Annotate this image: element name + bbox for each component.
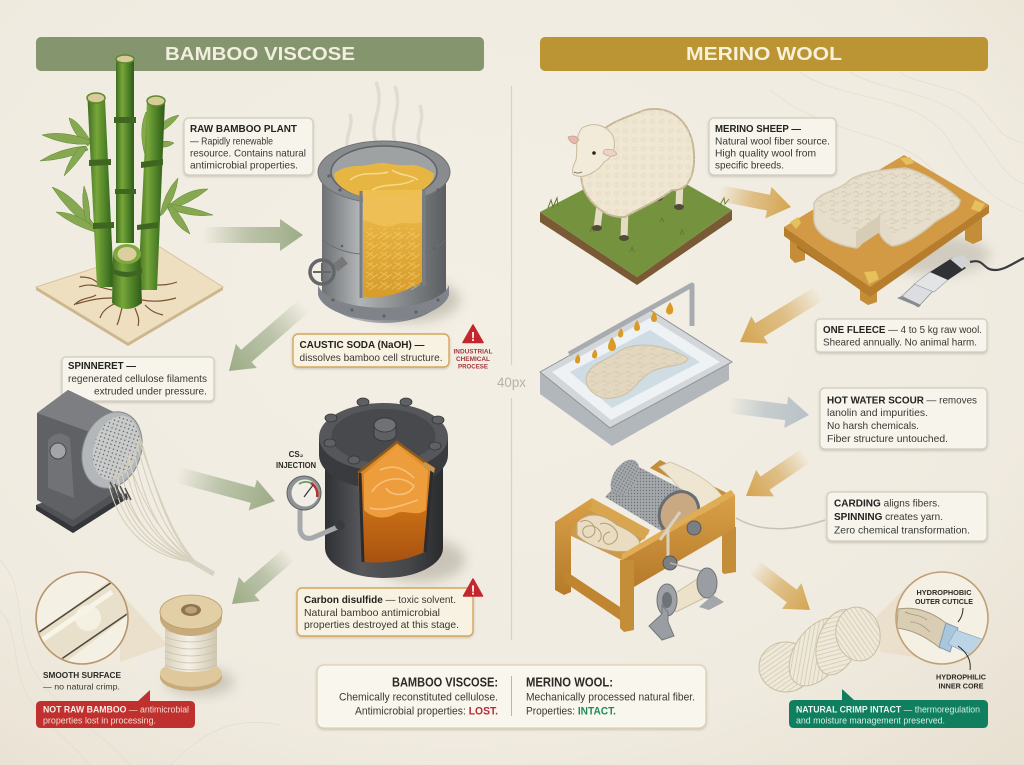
callout: spinneret <box>62 357 214 401</box>
callout: raw bamboo plant: resource. Contains natural <box>190 148 306 160</box>
callout: merino sheep <box>709 118 836 175</box>
callout: merino sheep: MERINO SHEEP — <box>715 124 802 135</box>
illustration: carbon disulfide reactor <box>287 398 465 582</box>
illustration: hot water scour tub <box>540 285 732 446</box>
callout: raw bamboo plant <box>184 118 313 175</box>
arrow: scour to carding <box>737 442 815 509</box>
callout: hot water scour: No harsh chemicals. <box>827 421 919 432</box>
callout: one fleece: Sheared annually. No animal harm. <box>823 338 977 348</box>
illustration: bamboo plant <box>36 55 223 346</box>
callout: caustic soda <box>293 334 449 367</box>
warning: industrial chemical process: PROCESE <box>458 364 489 370</box>
callout: merino sheep: High quality wool from <box>715 148 816 160</box>
spacing note: 40px <box>497 375 526 390</box>
arrow: sheep to fleece <box>716 177 794 223</box>
label: hydrophobic outer cuticle <box>915 588 973 606</box>
summary: bamboo viscose <box>339 676 498 718</box>
label: hydrophilic inner core <box>936 672 987 690</box>
callout: carbon disulfide: Natural bamboo antimicrobial <box>304 608 440 619</box>
callout: hot water scour: HOT WATER SCOUR — removes <box>827 396 977 406</box>
callout: carding and spinning: Zero chemical transformation. <box>834 526 970 536</box>
warning icon: carbon disulfide: ! <box>471 582 475 598</box>
label: smooth surface: SMOOTH SURFACE <box>43 670 121 680</box>
callout: spinneret: SPINNERET — <box>68 361 137 372</box>
callout: carbon disulfide: properties destroyed at this stage. <box>304 620 459 631</box>
illustration: magnified smooth fiber and spool <box>30 572 234 696</box>
label: hydrophobic outer cuticle: HYDROPHOBIC <box>916 588 972 597</box>
illustration: yarn skein and fiber cross-section <box>759 572 990 696</box>
arrow: carding to yarn <box>744 554 820 623</box>
callout: not raw bamboo <box>36 690 195 728</box>
callout: spinneret: regenerated cellulose filaments <box>68 374 207 385</box>
summary: merino wool: Mechanically processed natural fiber. <box>526 692 695 704</box>
callout: natural crimp intact: and moisture management preserved. <box>796 716 945 726</box>
header: merino wool <box>540 37 988 71</box>
arrow: scour to callout <box>727 389 811 431</box>
label: CS2 injection: INJECTION <box>276 461 316 470</box>
arrow: fleece to scour <box>732 279 829 356</box>
warning: industrial chemical process: ! <box>471 329 475 344</box>
summary: merino wool <box>526 676 695 718</box>
callout: one fleece: ONE FLEECE — 4 to 5 kg raw wool. <box>823 325 982 336</box>
warning icon: carbon disulfide <box>464 579 482 598</box>
label: hydrophilic inner core: INNER CORE <box>938 682 984 690</box>
callout: not raw bamboo: NOT RAW BAMBOO — antimicrobial <box>43 704 189 714</box>
illustration: merino sheep on grass <box>540 109 732 285</box>
warning: industrial chemical process: CHEMICAL <box>456 356 490 363</box>
callout: natural crimp intact <box>789 689 988 728</box>
callout: caustic soda: dissolves bamboo cell structure. <box>300 353 442 364</box>
callout: hot water scour: Fiber structure untouched. <box>827 434 948 445</box>
illustration: fleece on table <box>784 155 1024 307</box>
arrow: spinneret to CS2 vat <box>173 459 279 516</box>
callout: merino sheep: Natural wool fiber source. <box>715 136 830 148</box>
summary: bamboo viscose: Chemically reconstituted cellulose. <box>339 692 498 704</box>
arrow: bamboo to caustic vat <box>203 219 303 251</box>
callout: carding and spinning: SPINNING creates yarn. <box>834 512 943 523</box>
illustration: spinneret machine <box>36 390 214 574</box>
callout: raw bamboo plant: RAW BAMBOO PLANT <box>190 124 298 135</box>
callout: carbon disulfide: Carbon disulfide — toxic solvent. <box>304 595 456 606</box>
callout: natural crimp intact: NATURAL CRIMP INTACT — thermoregulation <box>796 704 980 714</box>
summary: bamboo viscose: BAMBOO VISCOSE: <box>392 676 498 690</box>
illustration: caustic soda vat <box>310 82 460 323</box>
summary panel <box>317 665 706 728</box>
callout: raw bamboo plant: — Rapidly renewable <box>190 136 273 148</box>
callout: one fleece <box>816 319 987 352</box>
label: smooth surface <box>43 670 121 692</box>
label: CS2 injection: CS₂ <box>289 450 304 459</box>
callout: merino sheep: specific breeds. <box>715 160 784 172</box>
callout: carding and spinning: CARDING aligns fibers. <box>834 498 940 510</box>
arrow: reactor to spool <box>222 541 301 616</box>
header: bamboo viscose <box>36 37 484 71</box>
illustration: carding machine <box>555 455 825 640</box>
summary: merino wool: MERINO WOOL: <box>526 676 613 690</box>
label: hydrophobic outer cuticle: OUTER CUTICLE <box>915 597 973 606</box>
callout: carbon disulfide <box>297 588 473 636</box>
arrow: vat to spinneret <box>219 293 315 383</box>
callout: raw bamboo plant: antimicrobial properties. <box>190 160 298 172</box>
header: merino wool: MERINO WOOL <box>686 43 842 64</box>
warning: industrial chemical process: INDUSTRIAL <box>454 348 493 356</box>
summary: merino wool: Properties: INTACT. <box>526 706 616 718</box>
label: smooth surface: — no natural crimp. <box>43 682 120 692</box>
label: hydrophilic inner core: HYDROPHILIC <box>936 672 987 682</box>
callout: not raw bamboo: properties lost in processing. <box>43 716 156 726</box>
callout: carding and spinning <box>827 492 987 541</box>
warning: industrial chemical process <box>454 325 493 370</box>
callout: hot water scour: lanolin and impurities. <box>827 408 928 419</box>
header: bamboo viscose: BAMBOO VISCOSE <box>165 43 355 64</box>
center divider <box>510 86 512 640</box>
summary: bamboo viscose: Antimicrobial properties: LOST. <box>355 706 498 718</box>
label: CS2 injection <box>276 450 316 470</box>
callout: spinneret: extruded under pressure. <box>94 386 207 398</box>
callout: caustic soda: CAUSTIC SODA (NaOH) — <box>300 340 425 351</box>
callout: hot water scour <box>820 388 987 449</box>
